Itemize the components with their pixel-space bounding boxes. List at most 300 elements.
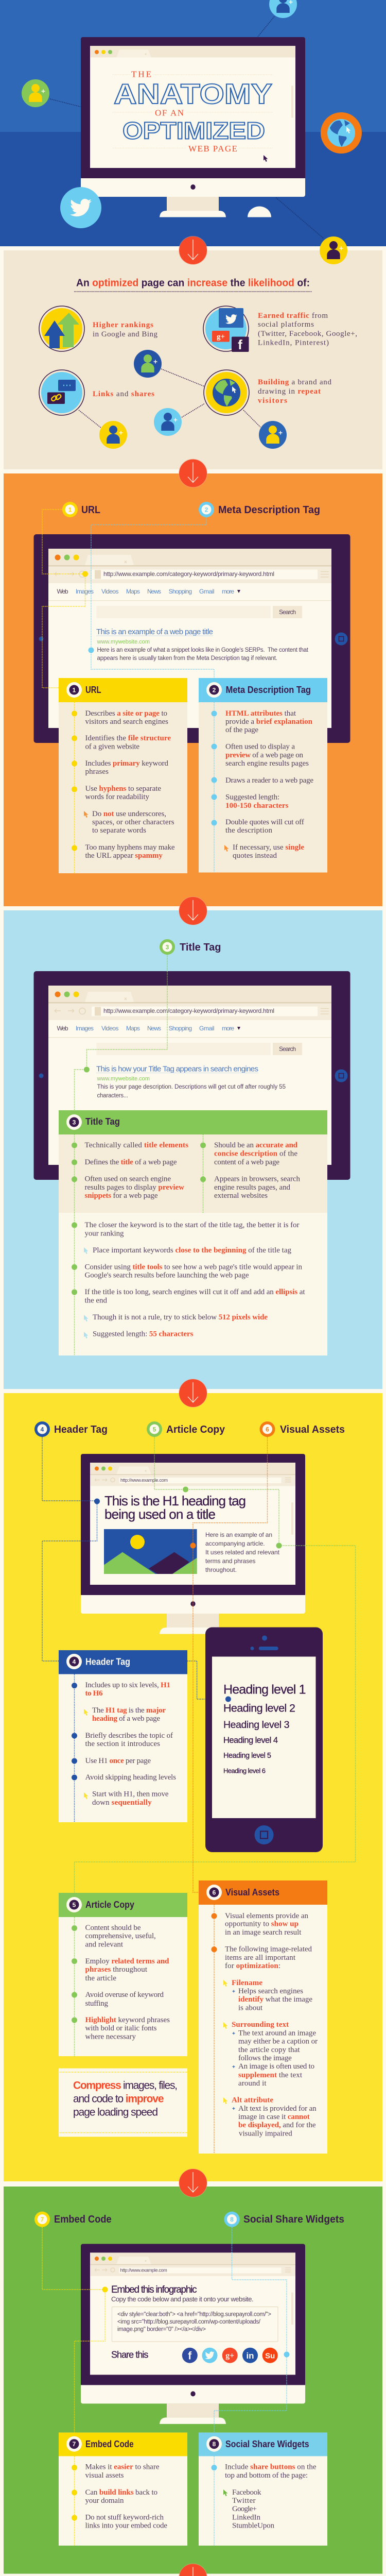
nav links: Images <box>76 1025 94 1032</box>
embed box: image.png" border="0" /></a></div> <box>117 2327 206 2333</box>
bullet text: your ranking <box>84 1229 124 1238</box>
serp result: www.mywebsite.com <box>97 639 150 645</box>
connector: embed code <box>42 2227 108 2433</box>
article text: It uses related and relevant <box>205 1549 280 1556</box>
icon: globe <box>321 112 362 154</box>
bullet text: the description <box>225 826 273 835</box>
bullet text: Facebook <box>232 2488 261 2497</box>
bullet text: results pages to display preview <box>84 1183 184 1192</box>
bullet text: may either be a caption or <box>238 2038 318 2046</box>
bullet text: Should be an accurate and <box>214 1141 298 1149</box>
bullet text: Technically called title elements <box>84 1141 188 1149</box>
text: earned traffic: LinkedIn, Pinterest) <box>258 339 329 347</box>
bullet text: Briefly describes the topic of <box>85 1732 173 1740</box>
bullet text: to H6 <box>85 1689 103 1698</box>
bullet text <box>84 709 175 860</box>
panel badge <box>206 2436 222 2452</box>
icon: social: f <box>238 337 242 352</box>
bullet text: where necessary <box>85 2033 136 2041</box>
title: OPTIMIZED <box>122 117 265 144</box>
icon: brand globe <box>204 370 249 415</box>
url text: http://www.example.com/category-keyword/primary-keyword.html <box>103 570 274 578</box>
bullet text: Visual elements provide an <box>225 1912 309 1920</box>
article text: accompanying article. <box>205 1540 265 1547</box>
hero section <box>0 0 386 246</box>
share row <box>111 2348 278 2363</box>
article text: throughout. <box>205 1566 237 1573</box>
callout: compress <box>59 2069 187 2137</box>
panel badge <box>206 682 222 698</box>
bullet text: Use hyphens to separate <box>85 785 161 793</box>
heading: URL <box>62 502 100 517</box>
callout: compress: page loading speed <box>73 2107 158 2119</box>
h1 example: being used on a title <box>104 1506 216 1522</box>
heading samples: Heading level 4 <box>223 1736 278 1745</box>
embed box <box>111 2284 278 2342</box>
browser dots <box>95 50 112 54</box>
panel: meta description <box>199 678 327 873</box>
panel title: Visual Assets <box>225 1887 279 1897</box>
bullet text: your domain <box>85 2497 124 2505</box>
callout: compress: Compress images, files, <box>73 2079 178 2092</box>
bullet text: of the page <box>225 726 258 734</box>
heading: title tag <box>160 939 221 955</box>
bullet text: be displayed, and for the <box>238 2121 316 2129</box>
panel: embed code <box>59 2433 187 2546</box>
bullet text: Twitter <box>232 2497 255 2505</box>
nav links: News <box>147 1025 161 1032</box>
connector: social share <box>214 2227 289 2433</box>
panel badge <box>206 1885 222 1900</box>
article text: terms and phrases <box>205 1557 255 1565</box>
bullet text: Surrounding text <box>232 2021 289 2029</box>
bullet text: and relevant <box>85 1940 124 1948</box>
title: THE <box>131 69 151 79</box>
heading: article copy: Article Copy <box>166 1424 225 1435</box>
bullet text: Consider using title tools to see how a web page's title would appear in <box>84 1263 303 1271</box>
bullet text <box>223 2463 317 2530</box>
serp result: This is how your Title Tag appears in search engines <box>96 1064 258 1074</box>
bullet text: visual assets <box>85 2471 124 2480</box>
bullet text: visitors and search engines <box>85 718 168 726</box>
bullet text: image in case it cannot <box>238 2113 310 2121</box>
bullet text: If necessary, use single <box>233 843 304 852</box>
heading: header tag: 4 <box>41 1426 44 1433</box>
browser dots <box>95 2257 112 2261</box>
section: likelihood <box>4 250 382 469</box>
panel badge: 6 <box>213 1889 216 1896</box>
text: links and shares: Links and shares <box>93 390 154 398</box>
bullet text: for optimization: <box>225 1962 280 1970</box>
h1 example <box>104 1493 246 1522</box>
heading: meta description: Meta Description Tag <box>218 504 320 516</box>
bullet text: The H1 tag is the major <box>92 1706 166 1715</box>
bullet text: Can build links back to <box>85 2488 157 2497</box>
icon: rankings <box>39 306 84 351</box>
bullet text: spaces, or other characters <box>92 818 174 826</box>
text: building a brand: drawing in repeat <box>258 387 321 396</box>
panel badge <box>66 1114 82 1130</box>
bullet text: engine results pages, and <box>214 1183 290 1192</box>
panel badge: 5 <box>73 1901 76 1908</box>
panel badge: 8 <box>213 2441 216 2448</box>
bullet text: opportunity to show up <box>225 1920 299 1928</box>
bullet text: Suggested length: <box>225 793 279 802</box>
bullet text: the URL appear spammy <box>85 852 163 860</box>
heading: meta description: 2 <box>205 506 208 513</box>
heading: URL: 1 <box>68 506 72 513</box>
heading samples <box>223 1682 306 1775</box>
url text: http://www.example.com/category-keyword/primary-keyword.html <box>103 1007 274 1014</box>
bullet text <box>84 1681 176 1807</box>
icon: person blue <box>134 350 162 378</box>
embed box: Embed this infographic <box>111 2284 197 2295</box>
panel badge <box>66 2436 82 2452</box>
desktop monitor <box>81 37 305 217</box>
image placeholder <box>104 1529 197 1574</box>
bullet text: Do not stuff keyword-rich <box>85 2513 164 2521</box>
heading: embed code: Embed Code <box>54 2214 112 2225</box>
bullet text: Avoid skipping heading levels <box>85 1773 176 1782</box>
title: OF AN <box>155 108 184 118</box>
bullet text: the article copy that <box>238 2046 300 2054</box>
bullet text: items are all important <box>225 1954 296 1962</box>
connector: title tag <box>74 955 167 1110</box>
title: WEB PAGE <box>188 144 237 154</box>
bullet text: Often used on search engine <box>84 1175 171 1183</box>
bullet text: snippets for a web page <box>84 1192 158 1200</box>
heading: visual assets <box>259 1421 345 1437</box>
text: earned traffic: Earned traffic from <box>258 312 328 320</box>
heading: meta description <box>199 502 320 517</box>
bullet text: Suggested length: 55 characters <box>93 1330 194 1338</box>
nav links: Shopping <box>169 588 192 595</box>
bullet text: in an image search result <box>225 1928 302 1937</box>
bullet text: provide a brief explanation <box>225 718 313 726</box>
embed box: <img src="http://blog.surepayroll.com/wp-content/uploads/ <box>117 2319 261 2325</box>
icon: person left <box>22 79 49 107</box>
nav links: Maps <box>126 588 140 595</box>
bullet text: search engine results pages <box>225 759 309 768</box>
bullet text: Start with H1, then move <box>92 1790 169 1799</box>
panel: header tag <box>59 1650 187 1822</box>
mouse <box>248 206 271 217</box>
section: header, article, visual <box>4 1393 382 2181</box>
nav links: Web <box>57 588 68 595</box>
share row: f <box>188 2350 192 2362</box>
heading: social share widgets: 8 <box>230 2216 234 2223</box>
bullet text: Do not use underscores, <box>92 810 166 818</box>
callout: compress: and code to improve <box>73 2093 164 2105</box>
bullet text: Makes it easier to share <box>85 2463 160 2471</box>
panel badge: 1 <box>73 686 76 693</box>
section: embed and social <box>4 2187 382 2574</box>
nav links: News <box>147 588 161 595</box>
bullet text: 100-150 characters <box>225 802 289 810</box>
heading: URL: URL <box>81 504 100 516</box>
bullet text: Too many hyphens may make <box>85 843 175 852</box>
serp result: www.mywebsite.com <box>97 1076 150 1082</box>
share row: Su <box>265 2351 275 2361</box>
text: building a brand <box>258 378 331 405</box>
nav links: Gmail <box>199 588 215 595</box>
bullet text: Helps search engines <box>238 1987 303 1995</box>
panel title: Social Share Widgets <box>225 2438 309 2449</box>
serp result: This is your page description. Descriptions will get cut off after roughly 55 <box>97 1084 286 1090</box>
connector: meta description <box>89 517 214 678</box>
bullet text <box>223 1912 318 2138</box>
bullet text: Defines the title of a web page <box>84 1158 177 1166</box>
share row: in <box>246 2351 254 2361</box>
section: URL and meta description <box>4 473 382 906</box>
panel: social share widgets <box>199 2433 327 2546</box>
panel title: Meta Description Tag <box>226 684 311 695</box>
heading samples: Heading level 3 <box>223 1719 289 1731</box>
bullet text: Double quotes will cut off <box>225 818 304 826</box>
bullet text: Employ related terms and <box>85 1957 169 1965</box>
desktop monitor <box>81 2244 305 2424</box>
icon: social: g+ <box>217 333 225 341</box>
icon: yellow person overlapping <box>320 236 347 264</box>
panel: title tag <box>59 1110 327 1355</box>
bullet text: follows the image <box>238 2054 292 2062</box>
bullet text: Includes up to six levels, H1 <box>85 1681 170 1689</box>
bullet text: comprehensive, useful, <box>85 1932 156 1940</box>
bullet text: preview of a web page on <box>225 751 304 759</box>
panel badge <box>66 682 82 698</box>
bullet text: heading of a web page <box>92 1715 160 1723</box>
bullet text: Often used to display a <box>225 743 295 751</box>
bullet text: An image is often used to <box>238 2062 314 2071</box>
bullet text: Alt attribute <box>232 2096 273 2105</box>
bullet text: phrases <box>85 768 109 776</box>
heading: social share widgets: Social Share Widgets <box>243 2214 344 2225</box>
text: higher rankings: Higher rankings <box>93 321 153 329</box>
panel title: Article Copy <box>85 1899 135 1910</box>
panel badge <box>66 1897 82 1912</box>
panel badge: 2 <box>213 686 216 693</box>
browser dots <box>55 991 79 997</box>
bullet text: is about <box>238 2004 263 2012</box>
bullet text: words for readability <box>85 793 149 801</box>
bullet text: top and bottom of the page: <box>225 2471 308 2480</box>
bullet text: links into your embed code <box>85 2522 167 2530</box>
bullet dots <box>72 1143 206 1295</box>
url text: http://www.example.com <box>120 2268 167 2273</box>
bullet dots <box>72 2465 77 2520</box>
text: earned traffic <box>258 312 357 347</box>
heading: article copy: 5 <box>153 1426 156 1433</box>
bullet text: of a given website <box>85 743 139 751</box>
bullet text <box>85 2463 167 2530</box>
panel badge: 3 <box>73 1119 76 1126</box>
icon: links <box>39 370 84 415</box>
bullet text: The following image-related <box>225 1945 312 1954</box>
bullet text: LinkedIn <box>232 2513 260 2521</box>
nav links <box>57 1025 296 1053</box>
heading: visual assets: Visual Assets <box>280 1424 345 1435</box>
browser dots <box>95 1466 112 1470</box>
bullet text: phrases throughout <box>85 1965 148 1974</box>
url text: http://www.example.com <box>120 1478 168 1483</box>
title <box>113 69 273 154</box>
embed box: <div style="clear:both"> <a href="http://blog.surepayroll.com/"> <box>117 2311 271 2317</box>
desktop monitor <box>81 1454 305 1634</box>
panel badge <box>66 1654 82 1669</box>
icon: persons <box>99 408 287 449</box>
heading: header tag: Header Tag <box>54 1424 108 1435</box>
nav links: Images <box>76 588 94 595</box>
text: building a brand: visitors <box>258 397 287 405</box>
heading samples: Heading level 5 <box>223 1752 271 1760</box>
bullet text: Content should be <box>85 1924 141 1932</box>
bullet text: Place important keywords close to the beginning of the title tag <box>93 1246 291 1255</box>
heading samples: Heading level 2 <box>223 1702 295 1715</box>
bullet text: If the title is too long, search engines will cut it off and add an ellipsis at <box>84 1288 305 1296</box>
nav links: Videos <box>101 588 118 595</box>
title: ANATOMY <box>114 78 272 110</box>
bullet dots <box>72 1683 77 1781</box>
heading: article copy <box>147 1421 225 1437</box>
bullet text: Though it is not a rule, try to stick below 512 pixels wide <box>93 1313 268 1321</box>
bullet text: the article <box>85 1974 116 1982</box>
bullet text: StumbleUpon <box>232 2522 275 2530</box>
bullet dot <box>211 2465 217 2470</box>
bullet text: visually impaired <box>239 2130 292 2138</box>
embed box: Copy the code below and paste it onto your website. <box>111 2295 254 2303</box>
nav links: Web <box>57 1025 68 1032</box>
panel: URL <box>59 678 187 873</box>
panel title: Title Tag <box>85 1116 120 1127</box>
bullet text <box>84 1141 305 1338</box>
share row: g+ <box>225 2351 234 2360</box>
bullet text: around it <box>238 2079 267 2088</box>
bullet text: Draws a reader to a web page <box>225 776 313 785</box>
nav links: more <box>222 588 234 595</box>
bullet text: external websites <box>214 1192 268 1200</box>
nav links: Search <box>279 1045 296 1053</box>
browser dots <box>55 554 79 561</box>
serp result: Here is an example of what a snippet looks like in Google's SERPs. The content that <box>97 647 309 653</box>
nav links: Search <box>279 608 296 616</box>
bullet text: Identifies the file structure <box>85 734 171 742</box>
icon: person top <box>269 0 297 18</box>
serp result <box>96 628 309 662</box>
panel title: Embed Code <box>85 2438 134 2449</box>
panel badge: 4 <box>73 1658 76 1665</box>
bullet text: Describes a site or page to <box>85 709 167 718</box>
heading: An optimized page can increase the likelihood of: <box>76 277 310 289</box>
bullet text: Avoid overuse of keyword <box>85 1991 164 1999</box>
heading: social share widgets <box>224 2212 344 2227</box>
bullet text: Alt text is provided for an <box>238 2105 317 2113</box>
nav links: more <box>222 1025 234 1032</box>
connector: header tag <box>42 1437 228 1699</box>
bullet text: quotes instead <box>233 852 277 860</box>
panel title: URL <box>85 684 101 695</box>
bullet text: Filename <box>232 1979 262 1987</box>
heading: title tag: 3 <box>166 944 169 951</box>
panel badge: 7 <box>73 2441 76 2448</box>
bullet text: Highlight keyword phrases <box>85 2016 170 2024</box>
text: higher rankings <box>93 321 157 338</box>
heading: embed code: 7 <box>41 2216 44 2223</box>
panel title: Header Tag <box>85 1656 130 1667</box>
panel: visual assets <box>199 1880 327 2154</box>
serp result: appears here is usually taken from the Meta Description tag if relevant. <box>97 655 277 662</box>
bullet text: HTML attributes that <box>225 709 296 718</box>
bullet text: The text around an image <box>238 2029 316 2037</box>
heading: visual assets: 6 <box>266 1426 269 1433</box>
icon: social <box>203 306 249 352</box>
serp result: characters... <box>97 1093 128 1099</box>
phone: heading levels <box>205 1627 323 1852</box>
bullet text: identify what the image <box>238 1995 312 2004</box>
bullet text <box>224 709 313 860</box>
bullet text: The closer the keyword is to the start of the title tag, the better it is for <box>84 1221 300 1229</box>
article text <box>205 1531 280 1573</box>
heading: embed code <box>34 2212 112 2227</box>
browser frame <box>34 534 350 743</box>
text: earned traffic: (Twitter, Facebook, Google+, <box>258 330 357 338</box>
bullet text: Use H1 once per page <box>85 1757 151 1765</box>
heading samples: Heading level 6 <box>223 1767 266 1775</box>
browser frame <box>34 971 350 1180</box>
nav links: Maps <box>126 1025 140 1032</box>
serp result <box>96 1064 286 1099</box>
bullet dots <box>211 1913 217 1952</box>
bullet text: Google's search results before launching the web page <box>84 1272 249 1280</box>
bullet text: supplement the text <box>238 2071 303 2079</box>
text: earned traffic: social platforms <box>258 320 314 329</box>
bullet text: the section it introduces <box>85 1740 160 1748</box>
section: title tag <box>4 910 382 1389</box>
heading: header tag <box>34 1421 108 1437</box>
bullet dots <box>211 711 217 825</box>
bullet text: content of a web page <box>214 1158 279 1166</box>
panel: article copy <box>59 1893 187 2056</box>
h1 example: This is the H1 heading tag <box>104 1493 246 1509</box>
nav links: Shopping <box>169 1025 192 1032</box>
bullet text: Google+ <box>232 2505 257 2513</box>
bullet dots <box>72 711 77 851</box>
nav links: Videos <box>101 1025 118 1032</box>
nav links <box>57 588 296 616</box>
article text: Here is an example of an <box>205 1531 272 1538</box>
nav links: Gmail <box>199 1025 215 1032</box>
bullet text: with bold or italic fonts <box>85 2024 157 2032</box>
bullet text: the end <box>84 1297 107 1305</box>
bullet text: stuffing <box>85 1999 108 2008</box>
bullet text: Includes primary keyword <box>85 759 169 768</box>
bullet text: down sequentially <box>92 1799 152 1807</box>
connector: visual assets <box>190 1437 268 1892</box>
bullet text: Appears in browsers, search <box>214 1175 301 1183</box>
bullet text <box>85 1924 170 2041</box>
serp result: This is an example of a web page title <box>96 628 213 636</box>
cursor <box>264 155 268 162</box>
heading: title tag: Title Tag <box>180 942 221 953</box>
text: higher rankings: in Google and Bing <box>93 330 157 338</box>
heading samples: Heading level 1 <box>223 1682 306 1697</box>
bullet dots <box>72 1925 77 2023</box>
bullet text: Include share buttons on the <box>225 2463 317 2471</box>
connector: article copy <box>74 1437 356 1893</box>
arrow badges <box>179 236 207 2576</box>
icon: twitter <box>60 187 101 228</box>
text: building a brand: Building a brand and <box>258 378 331 386</box>
connector: URL <box>42 510 88 688</box>
